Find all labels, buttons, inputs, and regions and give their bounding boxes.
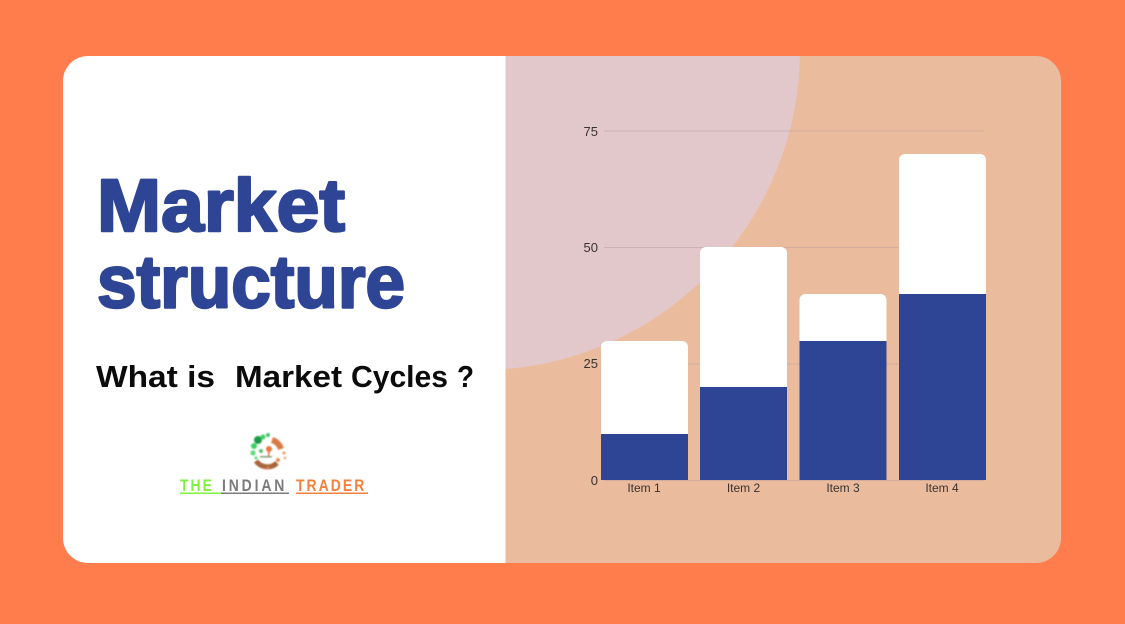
logo wordmark: THE bbox=[180, 477, 214, 495]
panel: title card bbox=[63, 56, 506, 563]
y axis labels: 50 bbox=[584, 240, 598, 255]
subtitle: What is bbox=[96, 359, 215, 394]
bar: Item 4 bbox=[899, 154, 986, 480]
panel: chart background bbox=[506, 56, 1061, 563]
y axis labels bbox=[584, 124, 598, 488]
subtitle: ? bbox=[457, 359, 474, 394]
logo wordmark: TRADER bbox=[296, 477, 366, 495]
x axis labels: Item 4 bbox=[925, 481, 959, 495]
infographic canvas bbox=[63, 56, 1061, 563]
grid lines bbox=[604, 131, 984, 480]
subtitle: Cycles bbox=[351, 359, 448, 394]
bar: Item 3 bbox=[800, 294, 886, 480]
x axis labels: Item 2 bbox=[727, 481, 760, 495]
title: Market bbox=[97, 164, 345, 247]
logo: The Indian Trader bbox=[180, 433, 368, 495]
logo wordmark bbox=[180, 477, 366, 495]
y axis labels: 25 bbox=[584, 356, 598, 371]
bar: Item 2 bbox=[700, 247, 787, 480]
title bbox=[97, 164, 405, 324]
title: structure bbox=[97, 240, 405, 324]
decorative circle bbox=[506, 56, 800, 369]
x axis labels: Item 1 bbox=[627, 481, 661, 495]
x axis labels bbox=[627, 481, 959, 495]
subtitle bbox=[96, 359, 474, 394]
logo wordmark: INDIAN bbox=[222, 477, 287, 495]
bar: Item 1 bbox=[601, 341, 688, 480]
y axis labels: 0 bbox=[591, 473, 598, 488]
icon: logo emblem bbox=[250, 433, 286, 470]
subtitle: Market bbox=[235, 359, 342, 394]
x axis labels: Item 3 bbox=[826, 481, 860, 495]
y axis labels: 75 bbox=[584, 124, 598, 139]
stacked bar chart bbox=[584, 124, 986, 495]
